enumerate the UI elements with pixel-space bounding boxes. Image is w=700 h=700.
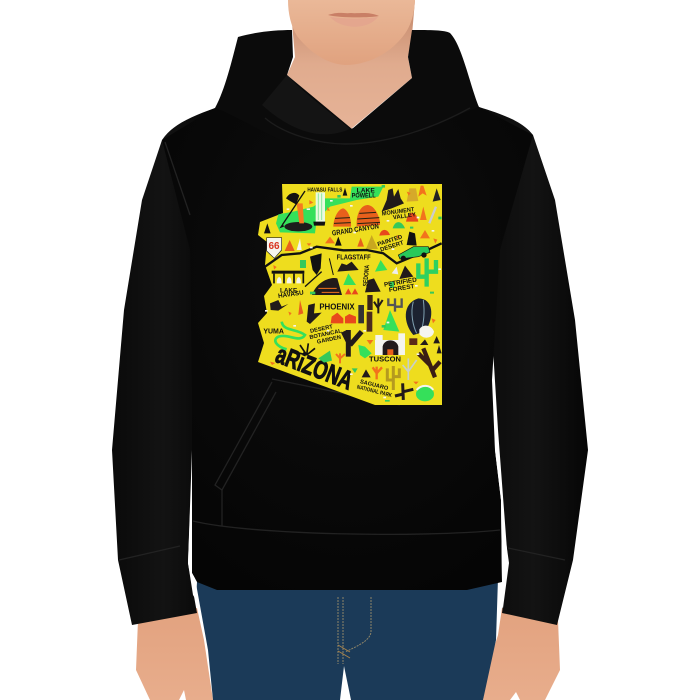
desert botanical garden label <box>308 322 344 347</box>
saguaro national park label: SAGUARO <box>359 379 389 392</box>
painted desert label <box>377 234 406 254</box>
hoodie body <box>162 100 533 590</box>
map silhouette <box>258 184 442 405</box>
monument valley buttes <box>379 186 441 236</box>
lake havasu second line: HAVASU <box>278 289 305 300</box>
cowboy in green car <box>398 232 430 261</box>
monument valley label: MONUMENT <box>382 207 415 218</box>
petrified forest label: PETRIFIED <box>384 277 418 289</box>
desert botanical garden label: BOTANICAL <box>309 328 343 341</box>
hot air balloon <box>406 298 434 345</box>
hiker on mountain <box>305 253 342 295</box>
southern map illustrations <box>263 289 442 402</box>
monument valley label <box>382 207 416 223</box>
scattered confetti marks, south <box>265 292 436 402</box>
petrified forest label <box>384 277 419 295</box>
lake powell label: LAKE <box>357 187 375 194</box>
desert botanical garden label: GARDEN <box>316 335 342 346</box>
scattered confetti marks, north <box>273 185 442 294</box>
green snake <box>275 322 305 349</box>
left sleeve <box>112 108 215 625</box>
jeans <box>195 578 498 700</box>
sedona label: SEDONA <box>362 264 371 287</box>
small trees and plants <box>264 188 430 251</box>
northern map illustrations <box>264 185 442 295</box>
painted desert label: PAINTED <box>377 234 404 248</box>
route 66 shield <box>267 238 282 258</box>
white gap beside left waist <box>188 513 197 600</box>
lake powell label <box>352 187 376 200</box>
painted desert label: DESERT <box>380 240 405 254</box>
monument valley label: VALLEY <box>393 212 416 221</box>
san xavier mission <box>375 333 405 355</box>
saguaro national park label: NATIONAL PARK <box>356 385 393 399</box>
hoodie pocket and band seams <box>119 142 565 560</box>
paddler on board <box>279 191 312 231</box>
flagstaff label: FLAGSTAFF <box>337 252 371 261</box>
right hand <box>483 608 560 700</box>
route 66 road <box>265 243 442 267</box>
grand canyon label: GRAND CANYON <box>331 221 379 238</box>
bridge <box>272 271 304 283</box>
arizona title: aRiZONA <box>272 339 357 396</box>
lake havasu label: LAKE <box>280 287 297 294</box>
flagstaff rocks and sedona formations <box>337 260 413 294</box>
agave and barrel plants <box>293 295 434 401</box>
route 66 shield: 66 <box>268 241 280 252</box>
neck and face <box>287 0 415 129</box>
desert botanical garden label: DESERT <box>310 324 334 335</box>
green lake and river <box>276 187 383 233</box>
yuma label: YUMA <box>263 328 284 335</box>
left hand <box>136 608 213 700</box>
saguaro cactus <box>418 258 436 287</box>
tuscon label: TUSCON <box>369 355 401 364</box>
black and coloured cacti <box>270 298 440 400</box>
phoenix label: PHOENIX <box>319 302 355 311</box>
dark rocks near tuscon <box>362 336 442 377</box>
waterfall <box>313 192 325 226</box>
Arizona map print <box>258 184 442 405</box>
havasu falls label: HAVASU FALLS <box>307 187 343 193</box>
saguaro national park label <box>356 379 395 399</box>
lake powell label: POWELL <box>352 193 376 200</box>
grand canyon rocks <box>333 205 380 227</box>
hood <box>215 30 479 144</box>
petrified forest label: FOREST <box>388 283 415 294</box>
white gap beside right waist <box>494 385 509 608</box>
right sleeve <box>479 107 588 625</box>
